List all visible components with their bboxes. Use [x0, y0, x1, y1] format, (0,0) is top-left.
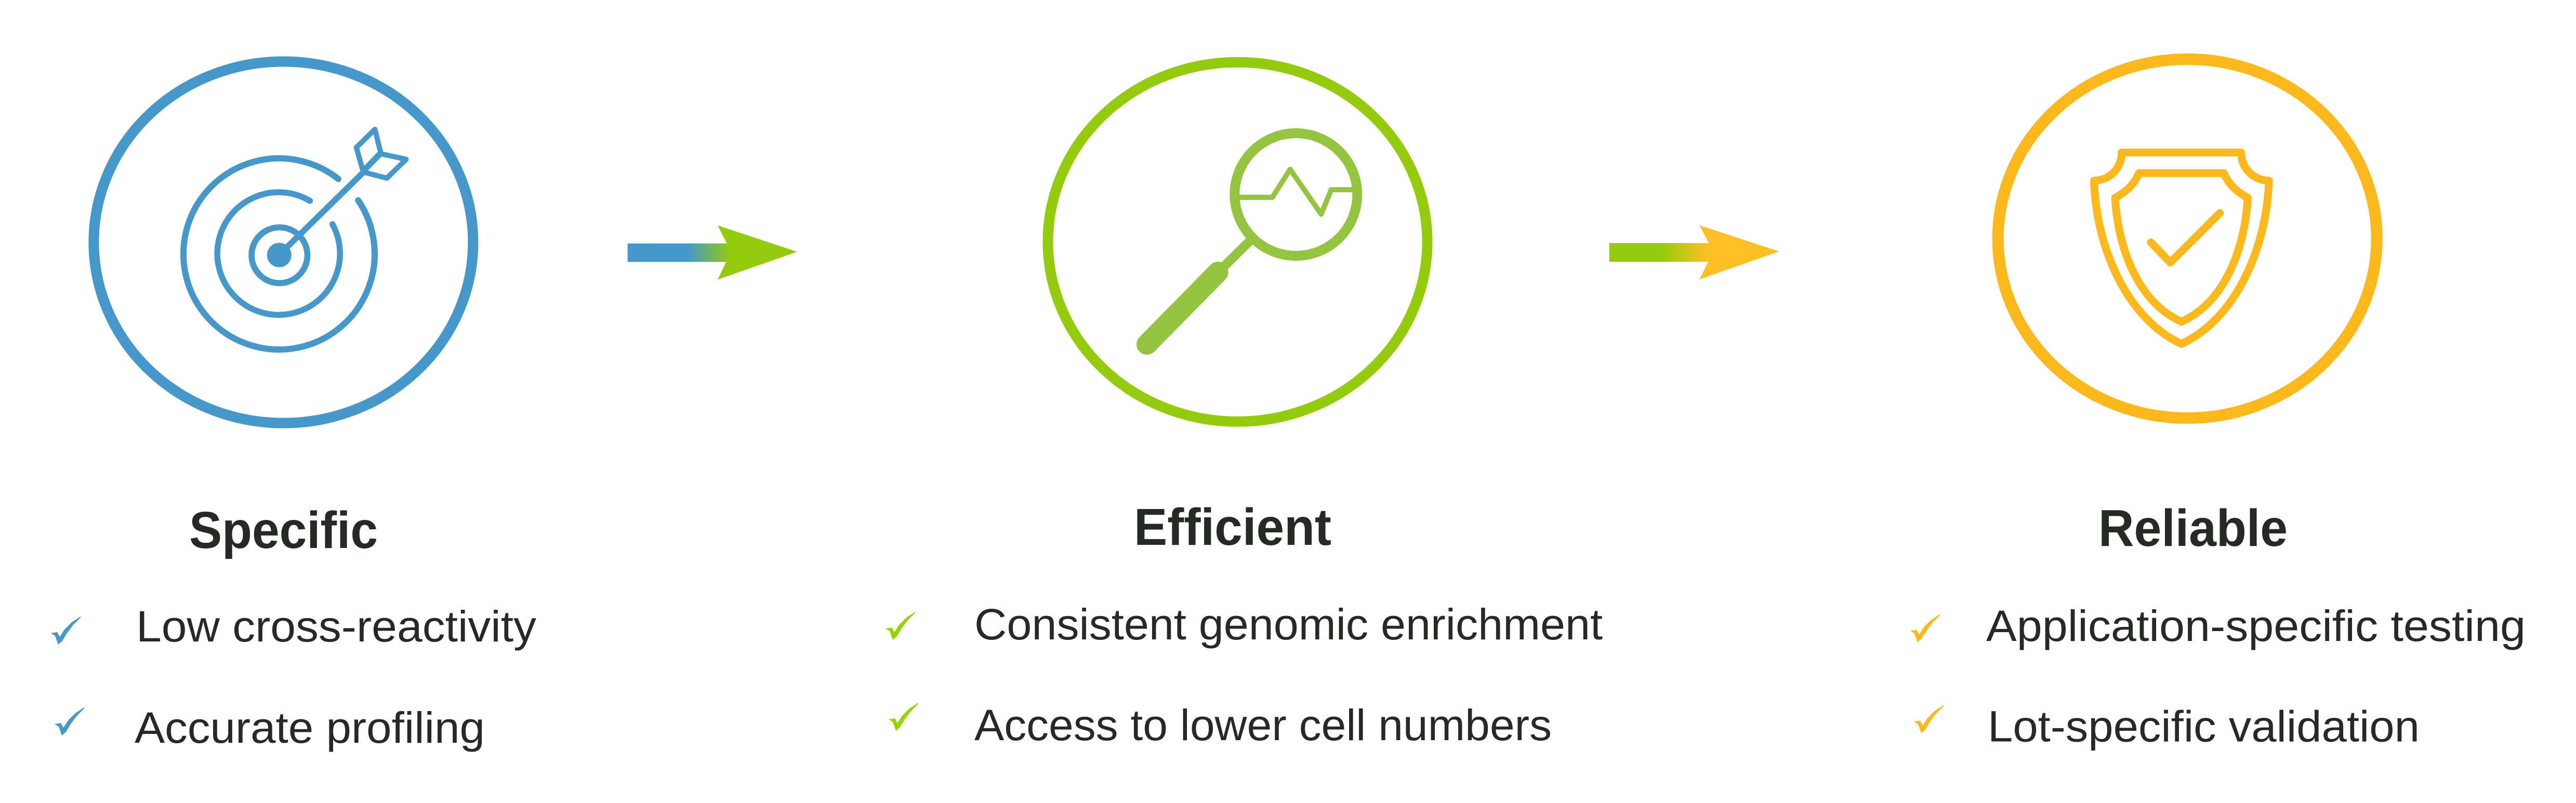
text: lot-specific validation: Lot-specific validation — [1988, 702, 2420, 751]
arrow: green to orange — [1609, 225, 1779, 279]
check: application-specific testing — [1910, 614, 1940, 642]
text: accurate profiling: Accurate profiling — [135, 703, 485, 752]
heading: Efficient: Efficient — [1134, 498, 1331, 556]
ring: efficient — [1048, 62, 1427, 422]
panel: efficient — [886, 62, 1603, 750]
arrow: blue to green — [628, 225, 797, 279]
check: access to lower cell numbers — [889, 703, 918, 731]
text: low cross-reactivity: Low cross-reactivity — [136, 602, 536, 651]
heading: Reliable: Reliable — [2098, 499, 2288, 557]
text: consistent genomic enrichment: Consistent genomic enrichment — [974, 600, 1603, 649]
icon: shield with check — [2094, 153, 2269, 344]
check: accurate profiling — [55, 707, 84, 735]
check: low cross-reactivity — [51, 617, 81, 645]
text: application-specific testing: Application-specific testing — [1986, 601, 2526, 650]
ring: specific — [94, 61, 473, 423]
text: access to lower cell numbers: Access to lower cell numbers — [974, 701, 1552, 750]
check: consistent genomic enrichment — [886, 612, 915, 640]
icon: target with arrow — [183, 129, 406, 350]
panel: reliable — [1910, 59, 2526, 751]
icon: magnifier with chart — [1147, 133, 1357, 344]
ring: reliable — [1998, 59, 2377, 418]
heading: Specific: Specific — [189, 501, 378, 559]
panel: specific — [51, 61, 536, 752]
check: lot-specific validation — [1914, 705, 1944, 733]
